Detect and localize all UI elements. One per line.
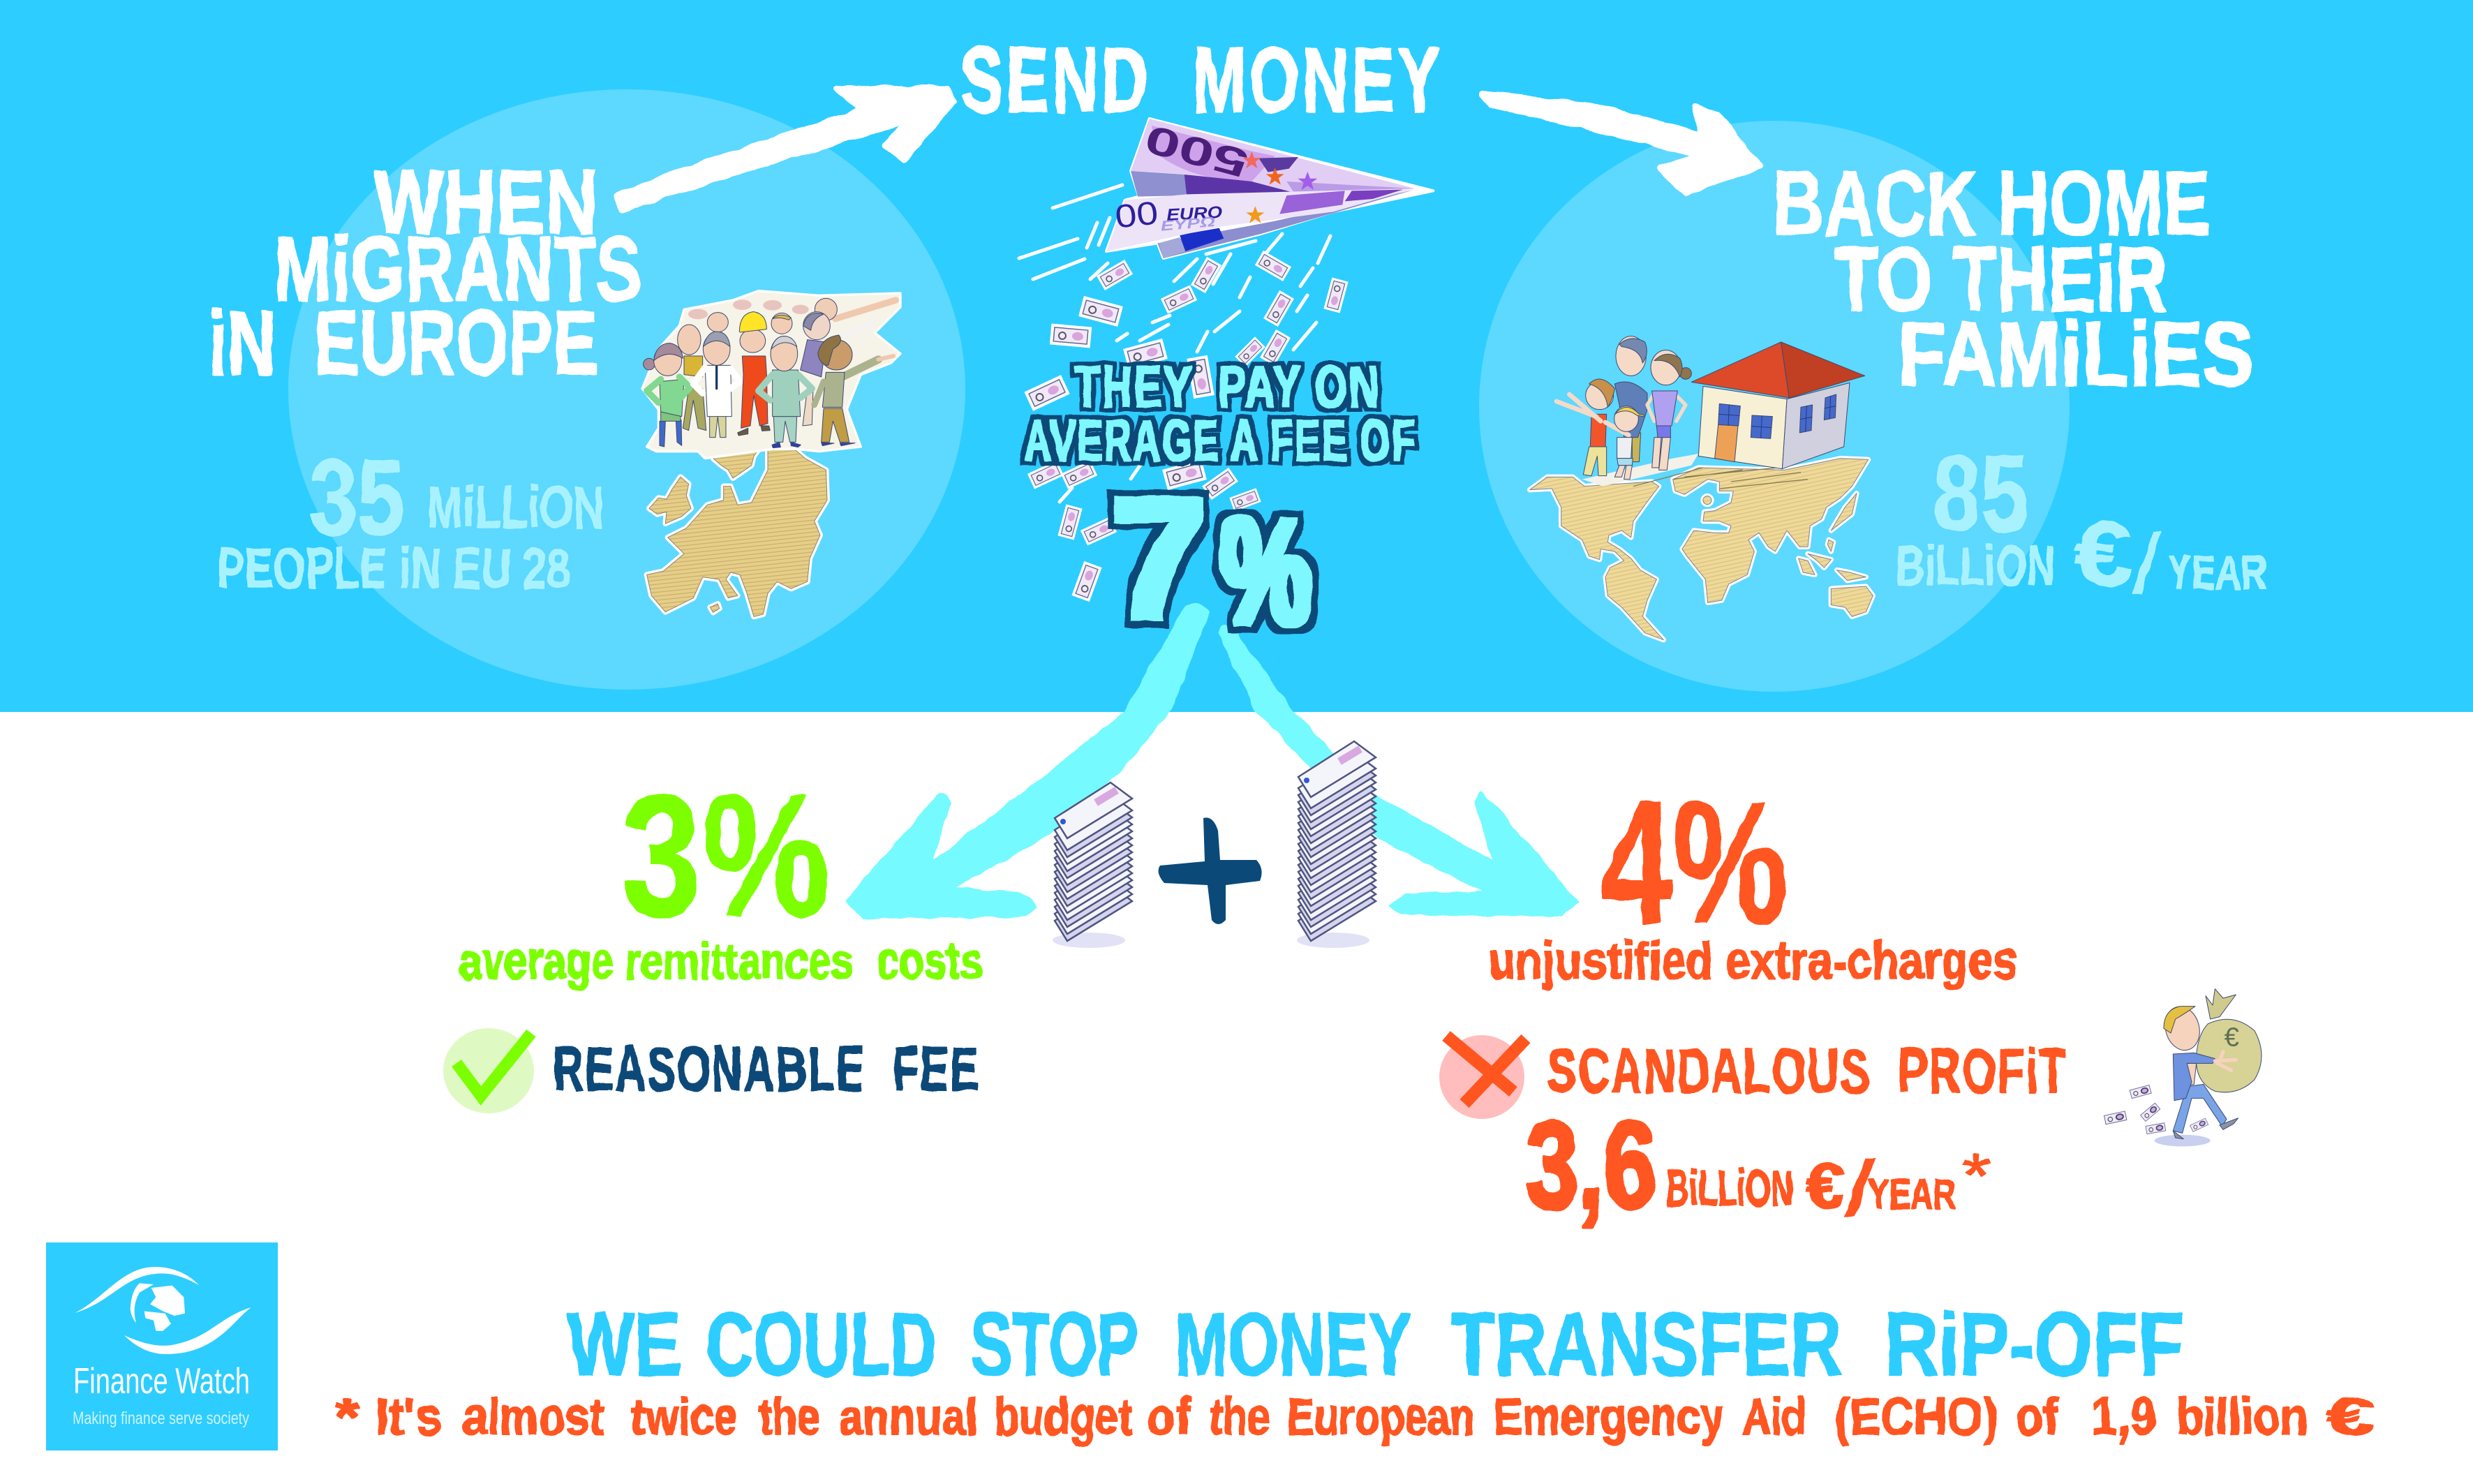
banknote digits: 00 [1113,194,1160,235]
stat: 85 billion euro per year: YEAR [2168,546,2267,599]
stat: 3,6 billion euro per year [1526,1095,1990,1234]
banknote currency: EURO [1166,203,1223,225]
call to action: WE [567,1295,681,1395]
right pale circle [1479,121,2070,692]
label: reasonable fee: REASONABLE FEE [553,1034,980,1104]
stat: 3,6 billion euro per year: / [1846,1145,1876,1231]
footnote: billion [2176,1388,2308,1446]
stat: 3,6 billion euro per year: 3,6 [1526,1095,1656,1234]
house shadow and ground strokes [1582,454,1808,489]
stat: 35 million people in EU 28: PEOPLE iN EU 28 [217,537,570,600]
call to action: RiP-OFF [1885,1295,2184,1395]
illustration: man carrying money sack [2102,989,2262,1146]
illustration: world map, house and family [1530,336,1873,640]
footnote: of [2016,1388,2058,1446]
stat: 35 million people in EU 28: MiLLiON [427,475,604,540]
footnote: It's [376,1388,442,1446]
logo globe [131,1283,185,1331]
stat: 85 billion euro per year: € [2074,503,2133,604]
footnote: annual [839,1388,978,1446]
call to action: STOP [970,1295,1138,1395]
text: they pay on average a fee of: AVERAGE A FEE OF [1024,408,1416,473]
footnote: Aid [1743,1388,1806,1446]
heading: when migrants in Europe [209,153,642,394]
blue top band [0,0,2473,712]
illustration: left stack of banknotes [1053,782,1132,948]
big number: 7 percent: % [1220,487,1311,655]
footnote: of [1147,1388,1191,1446]
falling banknotes and motion streaks [1019,185,1347,600]
illustration: man carrying money sack: € [2225,1022,2239,1052]
call to action: MONEY [1175,1295,1411,1395]
big number: 3 percent: 3% [621,758,830,953]
arrow: down left to 3 percent [846,602,1209,919]
big number: 4 percent: 4% [1601,765,1788,960]
stat: 85 billion euro per year: / [2133,518,2161,611]
big number: 7 percent [1110,461,1311,655]
footnote: (ECHO) [1834,1388,1998,1446]
heading: when migrants in Europe: WHEN [374,153,598,253]
Europe map [647,435,827,616]
family [1557,336,1691,480]
label: unjustified extra charges: unjustified extra-charges [1488,931,2018,990]
banknote value, upside down: 500 [1141,116,1253,186]
plus sign [1159,817,1262,924]
stat: 3,6 billion euro per year: € [1806,1151,1845,1221]
label: scandalous profit: SCANDALOUS PROFiT [1547,1037,2067,1106]
stat: 85 billion euro per year [1896,433,2267,611]
logo name: Finance Watch [73,1361,250,1402]
icon: cross mark [1439,1035,1526,1119]
stat: 35 million people in EU 28 [217,437,604,600]
footnote: € [2326,1388,2374,1446]
stat: 35 million people in EU 28: 35 [310,437,405,558]
footnote: budget [994,1388,1132,1446]
left pale circle [288,89,965,690]
illustration: paper plane made of banknote [1106,116,1433,258]
illustration: Europe map and crowd of migrants [642,291,900,616]
illustration: right stack of banknotes [1297,741,1376,948]
text: they pay on average a fee of: THEY PAY ON [1075,354,1381,420]
heading: back home to their families: FAMiLiES [1899,303,2254,405]
icon: check mark [443,1028,534,1113]
heading: send money: SEND MONEY [960,29,1443,131]
footnote: European [1287,1388,1475,1446]
footnote [334,1388,2374,1446]
logo: Finance Watch [46,1242,278,1450]
footnote: twice [631,1388,738,1446]
stat: 3,6 billion euro per year: YEAR [1869,1171,1956,1217]
crowd [642,291,900,459]
arrow: send money to families [1482,94,1760,193]
footnote: * [334,1388,359,1446]
house [1691,342,1865,469]
call to action [567,1295,2184,1395]
text: they pay on average a fee of [1024,354,1416,473]
heading: when migrants in Europe: MiGRANTS [274,218,642,320]
logo tagline: Making finance serve society [73,1409,249,1428]
stat: 3,6 billion euro per year: * [1962,1142,1990,1208]
arrow: down right to 4 percent [1218,625,1579,917]
footnote: the [1210,1388,1270,1446]
arrow: migrants to send money [617,89,953,209]
label: average remittances costs: average remittances costs [459,932,983,990]
stat: 85 billion euro per year: 85 [1933,433,2029,554]
stat: 85 billion euro per year: BiLLiON [1896,535,2056,597]
footnote: Emergency [1494,1388,1724,1446]
footnote: 1,9 [2091,1388,2156,1446]
heading: when migrants in Europe: iN EUROPE [209,292,598,394]
banknote currency, Greek: EYPΩ [1160,214,1216,235]
big number: 7 percent: 7 [1110,461,1208,655]
heading: back home to their families: TO THEiR [1834,228,2168,330]
footnote: almost [463,1388,604,1446]
logo eye swooshes [75,1267,251,1354]
call to action: TRANSFER [1451,1295,1842,1395]
call to action: COULD [706,1295,937,1395]
world map [1530,459,1873,640]
stat: 3,6 billion euro per year: BiLLiON [1666,1161,1794,1217]
footnote: the [759,1388,820,1446]
heading: back home to their families: BACK HOME [1773,152,2211,254]
heading: back home to their families [1773,152,2254,405]
